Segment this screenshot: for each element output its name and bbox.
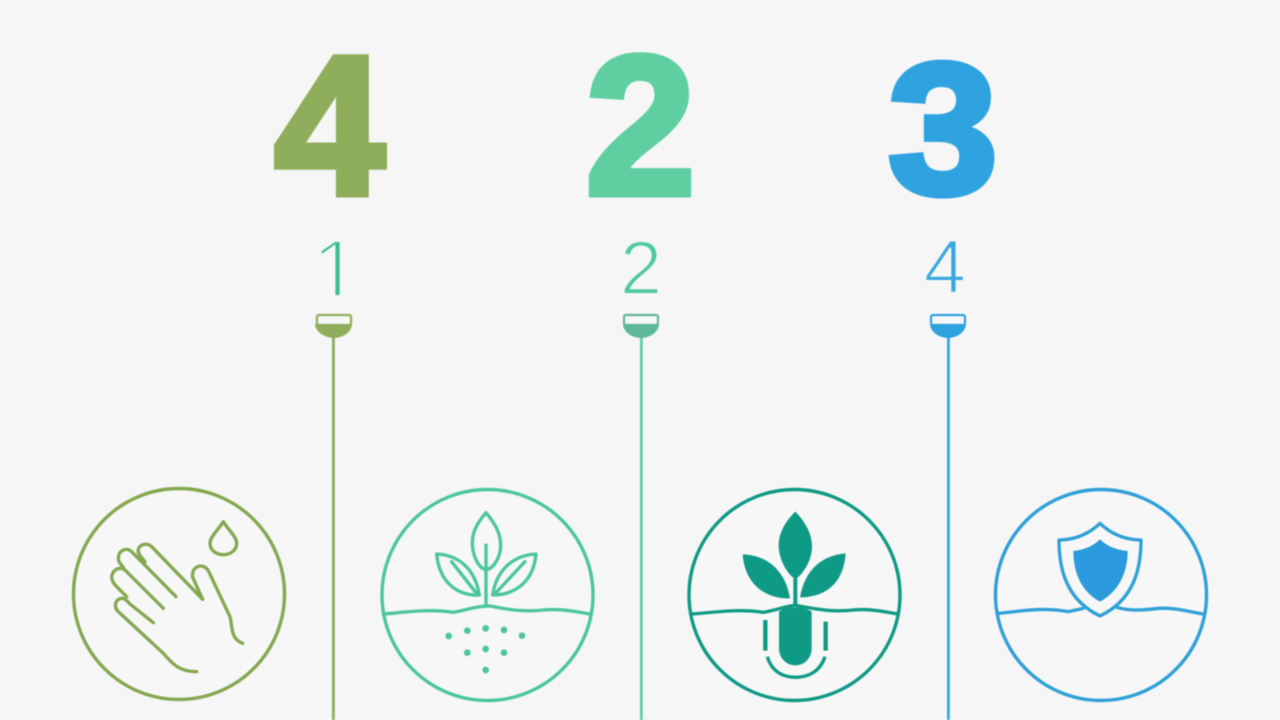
icon: shield on water line: [996, 490, 1206, 700]
big number 2: 2: [585, 15, 696, 236]
icon: solid plant with deep root: [689, 490, 900, 700]
big number 3: 3: [888, 24, 998, 233]
big number 4: 4: [274, 15, 385, 236]
pin and line: blue: [930, 315, 966, 720]
icon: hand with water drop: [74, 488, 284, 700]
pin and line: green: [623, 315, 659, 720]
small number 4: 4: [924, 225, 966, 310]
icon: seedling with soil dots: [382, 490, 593, 700]
pin and line: olive: [315, 315, 352, 720]
small number 1: 1: [312, 221, 360, 320]
small number 2: 2: [620, 226, 662, 311]
